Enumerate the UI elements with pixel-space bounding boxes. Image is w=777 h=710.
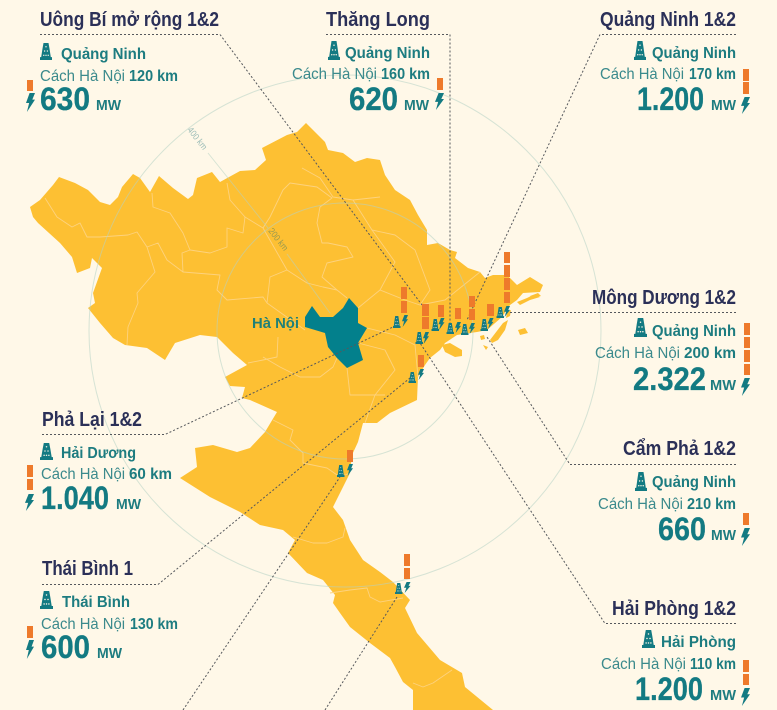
marker: Thái Bình xyxy=(408,355,424,383)
distance: Cách Hà Nội xyxy=(41,466,125,483)
capacity: 660 xyxy=(658,511,706,547)
distance: Cách Hà Nội xyxy=(41,616,125,633)
heading: Thái Bình 1 xyxy=(42,558,133,580)
heading: Thăng Long xyxy=(326,9,430,31)
distance xyxy=(41,466,172,483)
icon: plant xyxy=(40,443,53,460)
distance: Cách Hà Nội xyxy=(601,656,686,673)
icon: plant xyxy=(40,591,53,609)
marker: Phả Lại xyxy=(393,287,408,328)
province: Quảng Ninh xyxy=(652,45,736,62)
capacity: MW xyxy=(96,97,122,114)
capacity: MW xyxy=(710,687,737,704)
marker: Hải Phòng xyxy=(432,305,444,331)
icon: plant xyxy=(642,630,655,648)
marker: Quảng Ninh xyxy=(461,296,475,335)
capacity: 2.322 xyxy=(633,361,706,397)
capacity bar xyxy=(741,69,750,114)
province: Quảng Ninh xyxy=(61,46,146,63)
distance xyxy=(595,345,736,362)
province: Hải Dương xyxy=(61,445,136,462)
panel: Phả Lại 1&2 xyxy=(25,409,172,516)
capacity bar xyxy=(25,465,34,511)
distance xyxy=(601,656,736,673)
capacity bar xyxy=(26,80,35,112)
heading: Phả Lại 1&2 xyxy=(42,409,142,431)
capacity: 620 xyxy=(349,81,398,117)
capacity: MW xyxy=(711,97,737,114)
province: Quảng Ninh xyxy=(652,474,736,491)
capacity bar xyxy=(741,660,750,706)
distance xyxy=(598,496,736,513)
panel: Mông Dương 1&2 xyxy=(592,287,750,397)
marker: Thăng Long xyxy=(446,308,461,334)
distance: 210 km xyxy=(687,496,736,513)
capacity: MW xyxy=(116,496,142,513)
capacity: 1.200 xyxy=(637,81,704,117)
distance: 120 km xyxy=(129,68,178,85)
icon: plant xyxy=(328,41,340,60)
distance: 160 km xyxy=(381,66,430,83)
province: Quảng Ninh xyxy=(652,323,736,340)
capacity bar xyxy=(741,323,750,396)
capacity: 1.200 xyxy=(635,671,703,707)
distance: 60 km xyxy=(129,466,172,483)
heading: Cẩm Phả 1&2 xyxy=(623,438,736,460)
capacity: 630 xyxy=(40,81,90,117)
panel: Hải Phòng 1&2 xyxy=(601,598,750,707)
label: Hà Nội: Hà Nội xyxy=(252,315,299,332)
Hà Nội region xyxy=(305,298,367,368)
distance: 130 km xyxy=(130,616,178,633)
distance: Cách Hà Nội xyxy=(600,66,684,83)
heading: Uông Bí mở rộng 1&2 xyxy=(40,9,219,31)
distance: 110 km xyxy=(690,656,736,673)
distance: 170 km xyxy=(689,66,736,83)
heading: Mông Dương 1&2 xyxy=(592,287,736,309)
marker: southern plant 2 xyxy=(395,554,410,594)
map: northern Vietnam xyxy=(30,123,543,710)
icon: plant xyxy=(634,318,647,337)
marker: Cẩm Phả xyxy=(480,304,494,331)
capacity: MW xyxy=(710,377,737,394)
distance rings and radial scale xyxy=(89,75,601,587)
distance: Cách Hà Nội xyxy=(40,68,125,85)
distance: Cách Hà Nội xyxy=(598,496,683,513)
panel: Quảng Ninh 1&2 xyxy=(600,9,750,117)
marker: Mông Dương xyxy=(496,252,510,318)
capacity bar xyxy=(26,626,34,659)
panel: Cẩm Phả 1&2 xyxy=(598,438,750,547)
distance xyxy=(292,66,430,83)
icon: plant xyxy=(40,43,52,60)
heading: Quảng Ninh 1&2 xyxy=(600,9,736,31)
distance: Cách Hà Nội xyxy=(292,66,377,83)
province: Quảng Ninh xyxy=(345,45,430,62)
distance: Cách Hà Nội xyxy=(595,345,680,362)
ring label: 400 km: 400 km xyxy=(185,125,209,152)
icon: plant xyxy=(634,41,646,60)
panel: Thái Bình 1 xyxy=(26,558,178,665)
panel: Thăng Long xyxy=(292,9,444,117)
heading: Hải Phòng 1&2 xyxy=(612,598,736,620)
distance: 200 km xyxy=(684,345,736,362)
province: Hải Phòng xyxy=(661,634,736,651)
distance xyxy=(600,66,736,83)
islands xyxy=(442,293,541,357)
ring label: 200 km: 200 km xyxy=(266,226,290,253)
panel: Uông Bí mở rộng 1&2 xyxy=(26,9,219,117)
capacity xyxy=(41,629,123,665)
capacity: MW xyxy=(97,645,123,662)
marker: Uông Bí xyxy=(416,304,429,344)
icon: plant xyxy=(635,472,647,491)
distance xyxy=(41,616,178,633)
capacity bar xyxy=(741,513,750,546)
capacity xyxy=(349,81,430,117)
marker: southern plant 1 xyxy=(337,450,353,477)
capacity bar xyxy=(435,78,444,110)
capacity xyxy=(658,511,737,547)
capacity: MW xyxy=(711,527,737,544)
plant markers on map xyxy=(337,252,510,594)
capacity: MW xyxy=(404,97,430,114)
distance xyxy=(40,68,178,85)
capacity: 600 xyxy=(41,629,90,665)
province: Thái Bình xyxy=(62,594,130,611)
capacity: 1.040 xyxy=(41,480,109,516)
capacity xyxy=(40,81,122,117)
